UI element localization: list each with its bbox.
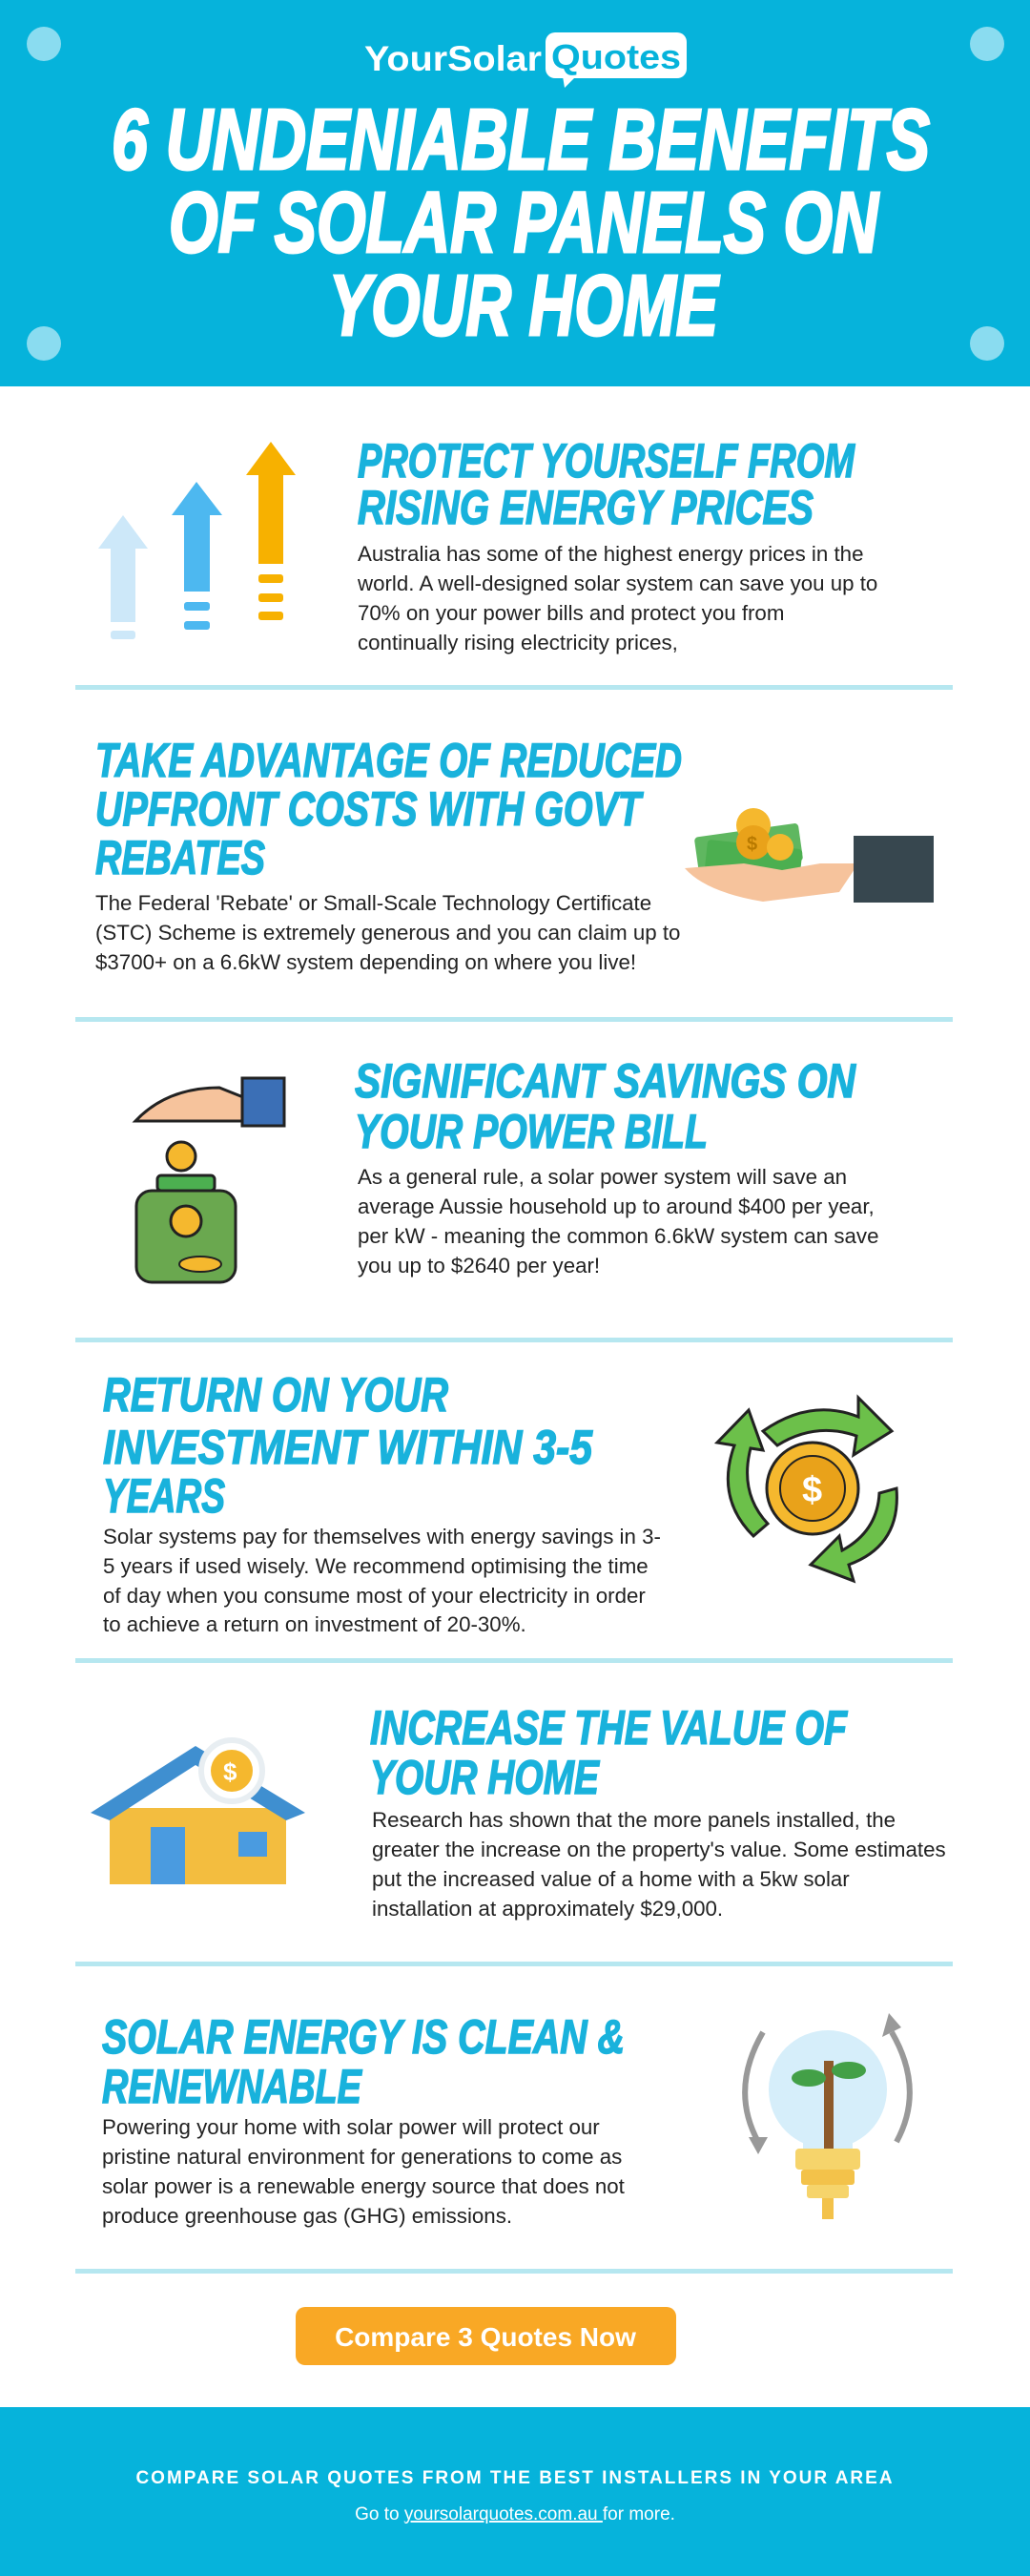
footer: COMPARE SOLAR QUOTES FROM THE BEST INSTALLERS IN YOUR AREA	[135, 2468, 895, 2488]
heading	[102, 2010, 625, 2113]
heading	[355, 1054, 856, 1158]
text	[103, 1525, 661, 1636]
icon: house: $	[223, 1757, 237, 1786]
heading: YOUR HOME	[370, 1751, 600, 1804]
text: As a general rule, a solar power system will save an	[358, 1165, 847, 1189]
header panel	[0, 0, 1030, 386]
heading: SIGNIFICANT SAVINGS ON	[355, 1054, 856, 1108]
text: 70% on your power bills and protect you from	[358, 601, 784, 625]
title	[112, 93, 930, 354]
button: compare quotes: Compare 3 Quotes Now	[335, 2322, 636, 2352]
heading: YOUR POWER BILL	[355, 1105, 708, 1158]
icon: recycle coin: $	[802, 1470, 822, 1510]
heading: TAKE ADVANTAGE OF REDUCED	[95, 734, 682, 787]
heading	[358, 434, 855, 534]
section 2: rebates	[95, 734, 934, 974]
text: pristine natural environment for generations to come as	[102, 2145, 622, 2169]
heading: YEARS	[103, 1469, 225, 1523]
heading: INVESTMENT WITHIN 3-5	[103, 1421, 593, 1474]
text: solar power is a renewable energy source that does not	[102, 2174, 626, 2198]
section 5: home value	[91, 1701, 946, 1921]
logo: YourSolar	[364, 39, 542, 78]
text: Solar systems pay for themselves with energy savings in 3-	[103, 1525, 661, 1548]
icon: house	[91, 1740, 305, 1884]
text	[357, 542, 877, 654]
text: of day when you consume most of your electricity in order	[103, 1584, 646, 1608]
text: produce greenhouse gas (GHG) emissions.	[102, 2204, 512, 2228]
section 6: clean energy	[102, 2010, 910, 2228]
icon: bulb	[745, 2013, 910, 2219]
text: world. A well-designed solar system can save you up to	[357, 571, 877, 595]
section 3: savings	[135, 1054, 878, 1282]
logo	[364, 32, 687, 88]
heading: RISING ENERGY PRICES	[358, 481, 814, 534]
text: $3700+ on a 6.6kW system depending on where you live!	[95, 950, 636, 974]
footer: Go to yoursolarquotes.com.au for more.	[355, 2504, 675, 2524]
icon: hand with money: $	[747, 834, 757, 855]
logo: Quotes	[551, 37, 681, 76]
title: YOUR HOME	[329, 259, 720, 354]
icon: recycle coin	[717, 1398, 896, 1581]
text: per kW - meaning the common 6.6kW system can save	[358, 1224, 878, 1248]
text	[372, 1808, 946, 1921]
text: (STC) Scheme is extremely generous and you can claim up to	[95, 921, 680, 945]
text: greater the increase on the property's value. Some estimates	[372, 1838, 946, 1861]
section 4: ROI	[103, 1368, 896, 1636]
icon: hand and jar	[135, 1078, 284, 1282]
button: compare quotes	[296, 2307, 676, 2365]
text: 5 years if used wisely. We recommend optimising the time	[103, 1554, 649, 1578]
heading	[95, 734, 682, 884]
text: installation at approximately $29,000.	[372, 1897, 723, 1921]
heading: RETURN ON YOUR	[103, 1368, 448, 1422]
heading: SOLAR ENERGY IS CLEAN &	[102, 2010, 625, 2064]
text	[102, 2115, 626, 2228]
heading: PROTECT YOURSELF FROM	[358, 434, 855, 488]
text: Research has shown that the more panels installed, the	[372, 1808, 896, 1832]
section 1: rising prices	[98, 434, 877, 654]
text	[358, 1165, 878, 1278]
text: continually rising electricity prices,	[358, 631, 678, 654]
icon: hand with money	[685, 808, 934, 903]
heading: UPFRONT COSTS WITH GOVT	[95, 782, 645, 836]
text: you up to $2640 per year!	[358, 1254, 600, 1278]
text: put the increased value of a home with a 5kw solar	[372, 1867, 850, 1891]
text: average Aussie household up to around $400 per year,	[358, 1195, 875, 1218]
text: to achieve a return on investment of 20-30%.	[103, 1612, 526, 1636]
heading: INCREASE THE VALUE OF	[370, 1701, 848, 1755]
footer	[0, 2407, 1030, 2576]
heading: REBATES	[95, 831, 265, 884]
heading	[103, 1368, 593, 1523]
icon: arrows	[98, 442, 296, 639]
text: Australia has some of the highest energy prices in the	[358, 542, 863, 566]
text: The Federal 'Rebate' or Small-Scale Technology Certificate	[95, 891, 651, 915]
heading	[370, 1701, 848, 1804]
text: Powering your home with solar power will protect our	[102, 2115, 600, 2139]
heading: RENEWNABLE	[102, 2060, 362, 2113]
text	[95, 891, 680, 974]
